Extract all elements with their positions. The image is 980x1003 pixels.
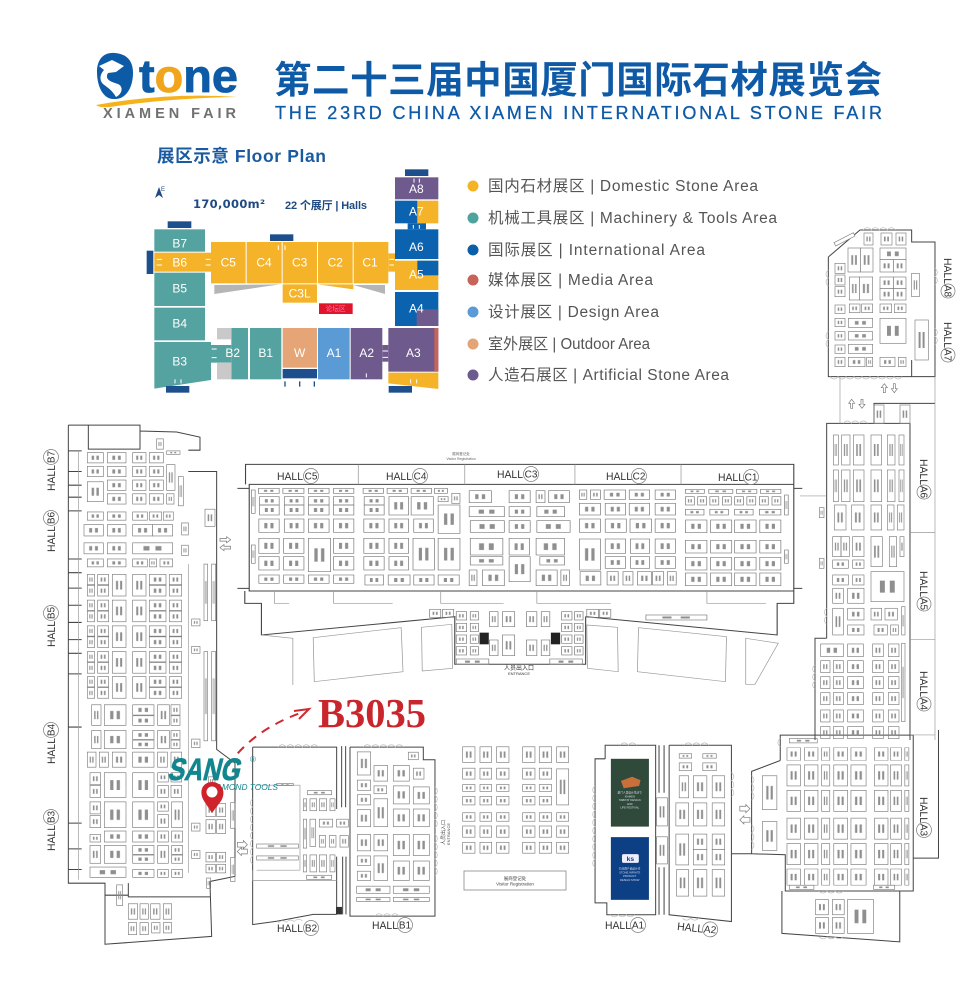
label: B1 entrance: 人员出入口 xyxy=(440,820,447,845)
hall labels: C4 xyxy=(256,255,272,269)
media strip xyxy=(434,328,438,372)
artificial stone halls xyxy=(351,177,438,379)
hall labels: B3 to B7 xyxy=(44,450,58,851)
hall labels: A3 xyxy=(406,346,421,360)
booths: lower rows xyxy=(87,705,183,877)
panel: Xiamen habitat design show: LIFE FESTIVAL xyxy=(620,806,640,810)
hall group B xyxy=(154,229,281,389)
stat: halls: 22 个展厅 | Halls xyxy=(285,199,367,212)
panel: Xiamen habitat design show: 厦门人居设计生活节 xyxy=(618,791,642,795)
walls xyxy=(253,746,435,925)
logo caption: diamond tools: DIAMOND TOOLS xyxy=(208,782,278,792)
label: hall C1: HALL xyxy=(718,472,744,484)
label: hall B5: B5 xyxy=(46,606,58,619)
header dividers xyxy=(261,464,766,685)
booths: A2 xyxy=(657,754,725,896)
label: B1 entrance xyxy=(440,820,451,845)
hall labels: B5 xyxy=(172,281,187,295)
central booths xyxy=(463,747,569,853)
hall W xyxy=(283,328,317,368)
stairs xyxy=(480,633,560,644)
label: hall A4: HALL xyxy=(917,671,929,697)
label: hall B3 xyxy=(44,810,58,851)
walls xyxy=(595,745,731,922)
label: hall C2: HALL xyxy=(606,471,632,483)
hall labels: B7 xyxy=(172,237,187,251)
label: visitor registration top: Visitor Registration xyxy=(446,457,476,461)
walls xyxy=(237,464,802,664)
hall labels: W xyxy=(294,346,306,360)
panel: Xiamen habitat design show xyxy=(611,759,649,827)
lobby panels xyxy=(313,624,778,684)
legend: design: 设计展区 | Design Area xyxy=(488,303,659,321)
label: hall C3 xyxy=(497,466,538,482)
label: hall A1: A1 xyxy=(632,920,645,932)
booths: C3 xyxy=(469,491,570,586)
label: hall B6 xyxy=(44,510,58,552)
label: hall B2: B2 xyxy=(305,924,318,934)
hall labels: C3 xyxy=(292,255,308,269)
label: hall B7 xyxy=(44,450,58,491)
hall labels: A4 xyxy=(409,302,424,316)
legend: domestic stone: 国内石材展区 | Domestic Stone Area xyxy=(488,177,758,195)
forum box: 论坛区 xyxy=(326,304,346,313)
floor plan diagram xyxy=(147,169,438,393)
logo caption: XIAMEN FAIR xyxy=(103,106,237,122)
label: hall B7: B7 xyxy=(46,450,58,463)
hall labels xyxy=(172,182,424,369)
label: hall C4 xyxy=(386,468,428,484)
label: hall B3: HALL xyxy=(46,825,58,851)
label: hall C4: HALL xyxy=(386,471,412,483)
panel: stone infinite design show: PRODUCT xyxy=(623,874,637,878)
label: hall A6 xyxy=(917,459,931,499)
legend: media: 媒体展区 | Media Area xyxy=(488,271,653,289)
panel: Xiamen habitat design show: AND xyxy=(627,802,633,806)
label: hall B1: HALL xyxy=(372,920,398,932)
label: hall B5 xyxy=(44,606,58,647)
label: visitor registration top: 展商登记处 xyxy=(452,451,470,456)
label: hall A5: HALL xyxy=(917,571,929,597)
label: hall A3: A3 xyxy=(918,824,928,837)
hall labels: A5 xyxy=(409,268,424,282)
walls xyxy=(68,425,235,944)
inner lines xyxy=(253,785,337,880)
label: hall A4 xyxy=(917,671,931,711)
label: hall A8 xyxy=(941,258,955,298)
hall labels: C1 to C5 xyxy=(277,466,758,484)
hall labels: B3 xyxy=(172,355,187,369)
hall labels: A6 xyxy=(409,240,424,254)
logo: SANG diamond tools xyxy=(165,752,278,792)
entrance arrows xyxy=(285,381,314,387)
hall labels: A2 xyxy=(359,346,374,360)
hall map: B1 B2 and central booths xyxy=(237,745,569,925)
label: hall C2: C2 xyxy=(633,472,646,482)
title: 第二十三届中国厦门国际石材展览会 xyxy=(274,59,882,101)
hall labels: A7 xyxy=(409,205,424,219)
label: visitor registration box: Visitor Registration xyxy=(496,882,534,886)
icon: location pin xyxy=(201,782,223,813)
label: hall C1: C1 xyxy=(745,472,758,484)
label: hall A8: HALL xyxy=(941,258,953,284)
booths: repeated rows xyxy=(87,574,182,698)
visitor registration tags xyxy=(147,169,428,393)
label: hall A5 xyxy=(917,571,931,611)
hall labels: C1 xyxy=(362,255,378,269)
booths: top rows xyxy=(84,453,183,567)
legend: artificial stone: 人造石展区 | Artificial Stone Area xyxy=(488,366,729,384)
label: hall A3: HALL xyxy=(917,797,929,823)
label: hall C3: HALL xyxy=(497,469,523,481)
hall labels: C5 xyxy=(221,255,236,269)
booth number: B3035 xyxy=(318,690,426,736)
label: entrance xyxy=(504,664,534,676)
arrows between A2 and A3 xyxy=(740,805,750,824)
stat: area: 170,000m² xyxy=(193,197,265,211)
right aisle line xyxy=(78,451,188,880)
logo swoosh xyxy=(96,96,238,107)
door arcs xyxy=(250,745,437,923)
booths: aisle columns and pin area xyxy=(117,439,235,935)
door arcs xyxy=(813,228,937,689)
panel: Xiamen habitat design show: HABITAT DESIGN xyxy=(619,798,641,802)
heading: floor plan: 展区示意 Floor Plan xyxy=(157,146,326,166)
panel: stone infinite design show: STONE INFINITE xyxy=(619,870,640,874)
label: hall B6: HALL xyxy=(46,526,58,552)
label: hall B7: HALL xyxy=(46,465,58,491)
hall labels: C2 xyxy=(328,255,343,269)
hall labels: B1 xyxy=(258,346,273,360)
label: hall A6: A6 xyxy=(918,486,928,499)
arrows between B3 and B2 xyxy=(237,841,247,856)
small connector arrows xyxy=(157,179,419,383)
label: hall A4: A4 xyxy=(918,698,928,711)
label: hall C2 xyxy=(606,468,646,484)
label: hall C1 xyxy=(718,470,758,484)
label: hall B5: HALL xyxy=(46,621,58,647)
door arcs xyxy=(593,738,843,939)
legend xyxy=(468,177,777,384)
hall labels: C3L xyxy=(289,287,311,301)
logo: Stone Xiamen Fair xyxy=(96,50,238,122)
label: hall B1 xyxy=(372,918,412,932)
hall map: A4 to A8 xyxy=(800,228,937,740)
subtitle: THE 23RD CHINA XIAMEN INTERNATIONAL STONE FAIR xyxy=(275,103,882,123)
booths: C2 xyxy=(579,490,676,585)
label: B1 entrance: ENTRANCE xyxy=(446,823,451,845)
hall labels: A8 xyxy=(409,182,424,196)
arrow: dashed curve to booth number xyxy=(228,709,309,766)
label: hall B4: HALL xyxy=(46,738,58,764)
booths: A6 xyxy=(819,435,904,568)
label: hall A1 xyxy=(605,918,646,932)
label: hall B2 xyxy=(277,920,318,936)
hall group C xyxy=(154,201,438,389)
logo word: tone: tone xyxy=(139,50,238,102)
booths: entrance lobby xyxy=(430,609,611,664)
booths: B1 xyxy=(357,752,429,901)
label: visitor registration box: 展商登记处 xyxy=(504,875,527,882)
legend: international: 国际展区 | International Area xyxy=(488,241,705,259)
outer lines xyxy=(800,377,935,740)
label: hall C5: C5 xyxy=(305,472,318,482)
label: hall C3: C3 xyxy=(525,470,538,480)
label: entrance: 人员出入口 xyxy=(504,664,534,672)
booths: B2 xyxy=(257,784,348,879)
panel: stone infinite design show: 石无限产品设计秀 xyxy=(619,867,641,871)
label: hall B1: B1 xyxy=(399,920,412,932)
walls xyxy=(815,230,935,740)
hall labels: A1 xyxy=(327,346,342,360)
label: hall A7 xyxy=(941,322,955,362)
hall map: A1 A2 A3 xyxy=(593,730,938,942)
panel: stone infinite design show xyxy=(611,837,649,900)
booths: C1 xyxy=(685,489,781,586)
forum box xyxy=(319,303,353,314)
label: hall A3 xyxy=(916,797,932,838)
label: hall C5: HALL xyxy=(277,471,303,483)
label: hall B6: B6 xyxy=(46,511,58,524)
panel: Xiamen habitat design show: XIAMEN xyxy=(625,794,635,798)
side booths xyxy=(251,490,788,620)
hall labels: B6 xyxy=(172,255,187,269)
booths: A5 xyxy=(833,537,905,635)
label: hall A8: A8 xyxy=(942,285,952,298)
hall map: B3 to B7 xyxy=(68,425,235,944)
label: hall A7: A7 xyxy=(942,349,952,362)
label: hall A2 xyxy=(677,918,718,938)
label: hall A1: HALL xyxy=(605,920,631,932)
booths: A8 and A7 xyxy=(834,233,928,423)
booths: A4 xyxy=(821,643,905,739)
label: hall A2: A2 xyxy=(703,924,717,937)
panel: stone infinite design show: ks xyxy=(627,856,634,863)
hall labels: B4 xyxy=(172,317,187,331)
label: hall A5: A5 xyxy=(918,598,928,611)
label: visitor registration box xyxy=(464,871,566,890)
hall labels: B2 xyxy=(225,346,240,360)
arrows between B and C xyxy=(220,537,231,551)
label: visitor registration top xyxy=(446,451,476,461)
panel: stone infinite design show: DESIGN SHOW xyxy=(620,878,640,882)
hall A1 xyxy=(318,328,350,379)
hall group A blue xyxy=(395,201,438,326)
logo word: SANG: SANG xyxy=(165,752,246,787)
label: hall B2: HALL xyxy=(277,923,303,935)
booths: A3 xyxy=(762,738,909,933)
label: hall A6: HALL xyxy=(917,459,929,485)
legend: outdoor: 室外展区 | Outdoor Area xyxy=(488,335,650,353)
hall map: C1 to C5 xyxy=(237,464,802,685)
icon: dragon stone xyxy=(97,53,133,99)
registered mark: ® xyxy=(250,755,256,764)
icon: north marker: E xyxy=(161,187,165,193)
icon: north marker xyxy=(155,187,165,198)
label: hall C5 xyxy=(277,468,318,484)
grey forecourt wedges xyxy=(214,284,385,294)
arrows between A7 and A6 xyxy=(849,384,897,408)
label: hall A2: HALL xyxy=(677,921,704,936)
label: entrance: ENTRANCE xyxy=(508,671,530,676)
label: hall B3: B3 xyxy=(46,810,58,823)
stairs xyxy=(336,907,342,914)
label: hall B4: B4 xyxy=(46,723,58,736)
legend: machinery: 机械工具展区 | Machinery & Tools Area xyxy=(488,209,777,227)
label: hall C4: C4 xyxy=(414,472,427,482)
booths: C5 and C4 xyxy=(258,488,460,585)
label: hall B4 xyxy=(44,722,58,764)
label: hall A7: HALL xyxy=(941,322,953,348)
